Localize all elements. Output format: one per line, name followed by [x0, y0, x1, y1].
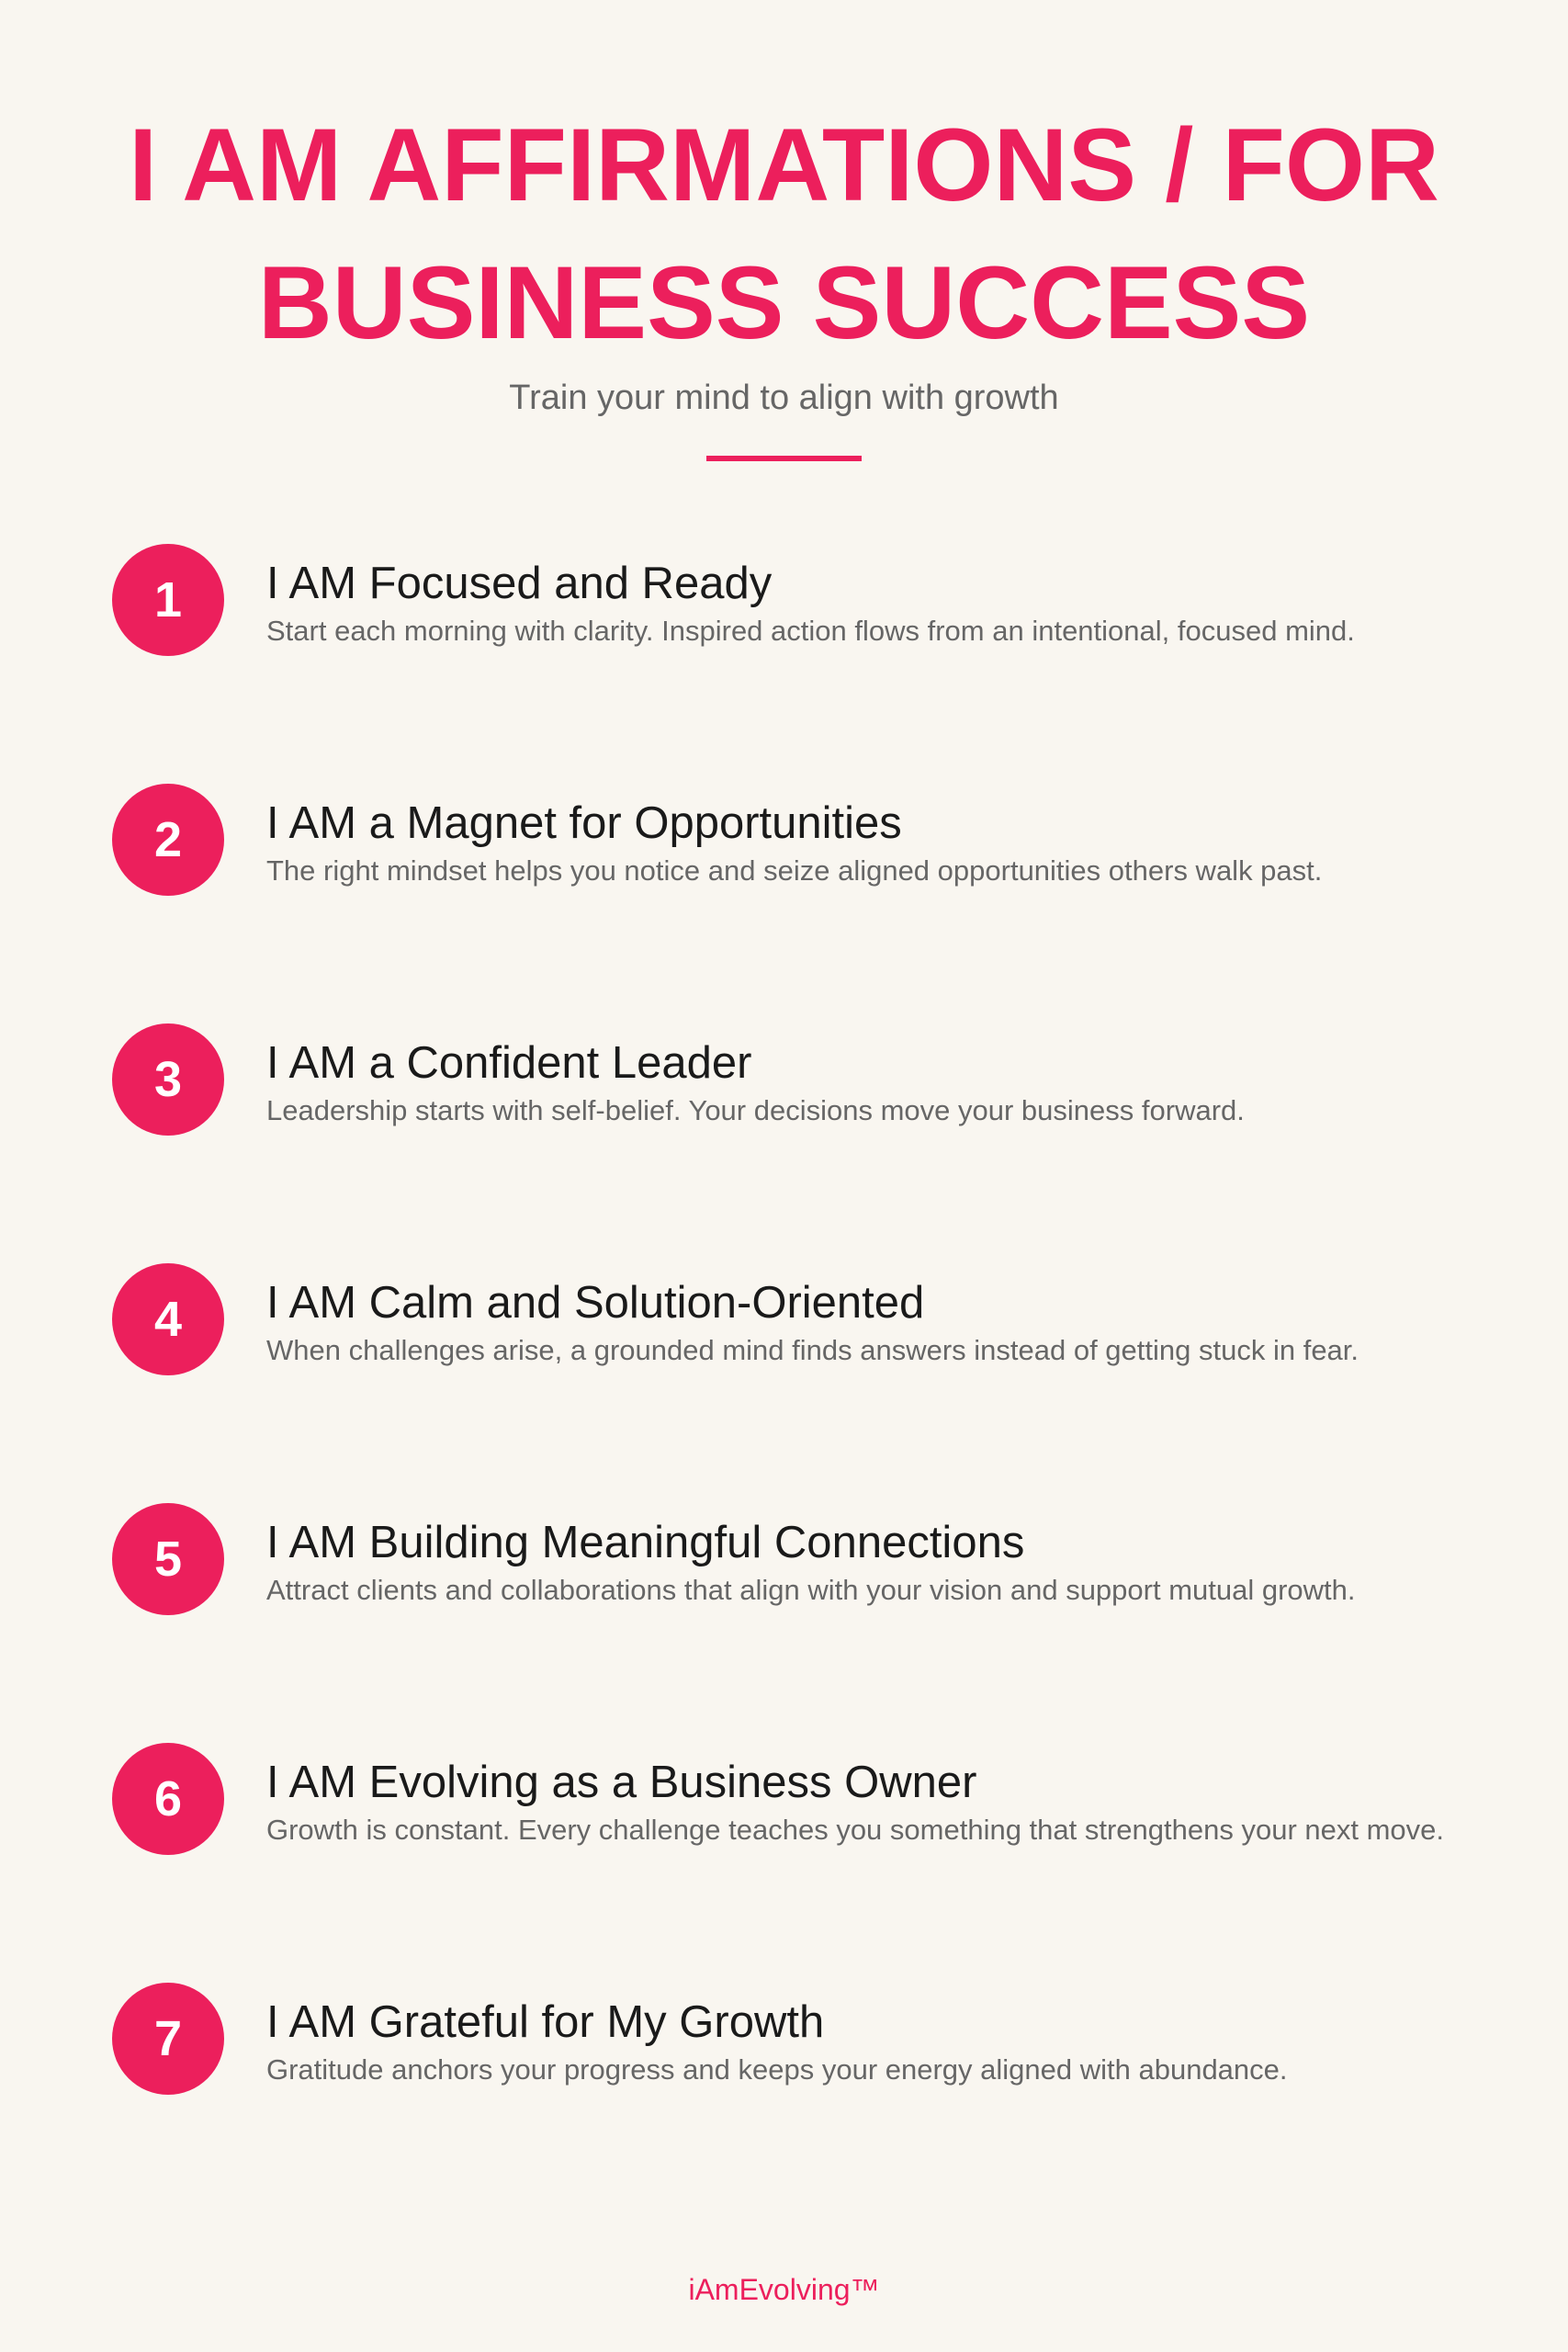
item 6: [112, 1743, 1444, 1855]
number badge 3: [112, 1023, 224, 1136]
item 5: [112, 1503, 1356, 1615]
heading 6: I AM Evolving as a Business Owner: [266, 1758, 976, 1807]
number badge 2: 2: [154, 812, 182, 867]
number badge 6: 6: [154, 1771, 182, 1826]
heading 4: I AM Calm and Solution-Oriented: [266, 1278, 924, 1328]
description 1: Start each morning with clarity. Inspired action flows from an intentional, focused mind.: [266, 615, 1355, 647]
number badge 4: 4: [154, 1292, 182, 1347]
description 4: When challenges arise, a grounded mind finds answers instead of getting stuck in fear.: [266, 1334, 1359, 1366]
divider accent: [706, 456, 862, 461]
number badge 1: [112, 544, 224, 656]
description 7: Gratitude anchors your progress and keeps your energy aligned with abundance.: [266, 2053, 1288, 2086]
description 3: Leadership starts with self-belief. Your decisions move your business forward.: [266, 1094, 1245, 1126]
item 4: [112, 1263, 1359, 1375]
number badge 3: 3: [154, 1052, 182, 1107]
number badge 7: 7: [154, 2011, 182, 2066]
number badge 1: 1: [154, 572, 182, 628]
number badge 7: [112, 1983, 224, 2095]
description 5: Attract clients and collaborations that align with your vision and support mutual growth.: [266, 1574, 1356, 1606]
item 7: [112, 1983, 1288, 2095]
number badge 6: [112, 1743, 224, 1855]
number badge 5: 5: [154, 1532, 182, 1587]
heading 2: I AM a Magnet for Opportunities: [266, 798, 902, 848]
item 1: [112, 544, 1355, 656]
footer brand: iAmEvolving™: [688, 2273, 880, 2306]
title: [129, 107, 1439, 360]
heading 5: I AM Building Meaningful Connections: [266, 1518, 1024, 1567]
subtitle: Train your mind to align with growth: [509, 379, 1059, 417]
title: I AM AFFIRMATIONS / FOR: [129, 107, 1439, 222]
heading 1: I AM Focused and Ready: [266, 559, 772, 608]
item 2: [112, 784, 1322, 896]
description 2: The right mindset helps you notice and seize aligned opportunities others walk past.: [266, 854, 1322, 887]
heading 7: I AM Grateful for My Growth: [266, 1997, 824, 2047]
title: BUSINESS SUCCESS: [258, 245, 1310, 360]
heading 3: I AM a Confident Leader: [266, 1038, 751, 1088]
description 6: Growth is constant. Every challenge teaches you something that strengthens your next move.: [266, 1814, 1444, 1846]
number badge 5: [112, 1503, 224, 1615]
number badge 4: [112, 1263, 224, 1375]
item 3: [112, 1023, 1245, 1136]
number badge 2: [112, 784, 224, 896]
